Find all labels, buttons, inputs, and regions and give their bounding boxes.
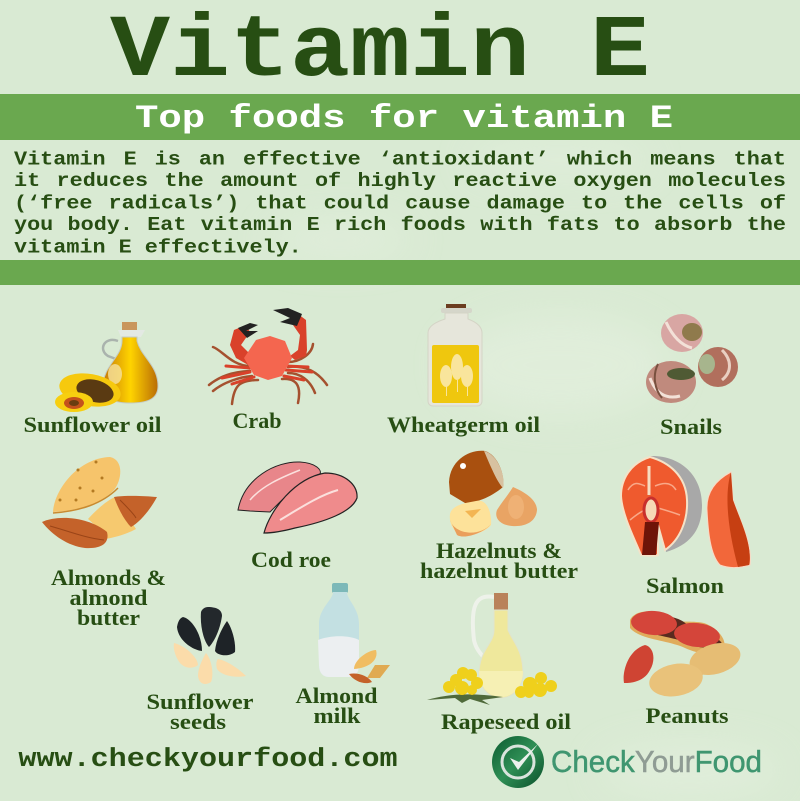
label: sunflower seeds [146,689,254,734]
icon: wheatgerm oil [428,304,482,406]
heading band: Top foods for vitamin E [135,100,673,137]
icon: snails [646,314,738,403]
website url: www.checkyourfood.com [18,746,398,774]
icon: cod roe [238,462,357,533]
label: almond milk: milk [314,703,361,728]
label: almonds and almond butter: almond [70,585,148,610]
label: hazelnuts and hazelnut butter: Hazelnuts & [436,538,562,563]
lower band [0,260,800,285]
label: almond milk: Almond [296,683,378,708]
label: rapeseed oil: Rapeseed oil [441,709,571,734]
title: Vitamin E [110,3,650,102]
label: peanuts: Peanuts [646,703,729,728]
label: hazelnuts and hazelnut butter: hazelnut butter [420,558,578,583]
icon: peanuts [624,609,744,700]
intro text block: you body. Eat vitamin E rich foods with fats to absorb the [14,214,786,236]
label: sunflower oil: Sunflower oil [24,412,162,437]
label: sunflower seeds: seeds [170,709,226,734]
intro text block: it reduces the amount of highly reactive oxygen molecules [14,170,786,192]
intro text block: vitamin E effectively. [14,236,302,258]
logo: CheckYourFood: CheckYourFood [551,744,762,779]
intro text block [14,148,786,258]
label: almonds and almond butter [51,565,166,630]
label: cod roe: Cod roe [251,547,331,572]
logo: CheckYourFood [492,736,762,788]
icon: rapeseed oil [427,593,557,705]
label: wheatgerm oil: Wheatgerm oil [387,412,540,437]
label: hazelnuts and hazelnut butter [420,538,578,583]
label: snails: Snails [660,414,722,439]
icon: almonds [42,457,157,548]
icon: almond milk [318,583,390,683]
icon: salmon [621,456,750,568]
heading band [0,94,800,140]
intro text block: Vitamin E is an effective ‘antioxidant’ which means that [14,148,786,170]
icon: hazelnuts [449,451,537,537]
icon: sunflower oil [55,322,158,412]
icon: crab [209,308,327,404]
label: almonds and almond butter: butter [77,605,140,630]
label: almond milk [296,683,378,728]
label: crab: Crab [232,408,282,433]
icon: sunflower seeds [174,607,246,684]
label: sunflower seeds: Sunflower [146,689,254,714]
label: salmon: Salmon [646,573,724,598]
label: almonds and almond butter: Almonds & [51,565,166,590]
intro text block: (‘free radicals’) that could cause damage to the cells of [14,192,786,214]
